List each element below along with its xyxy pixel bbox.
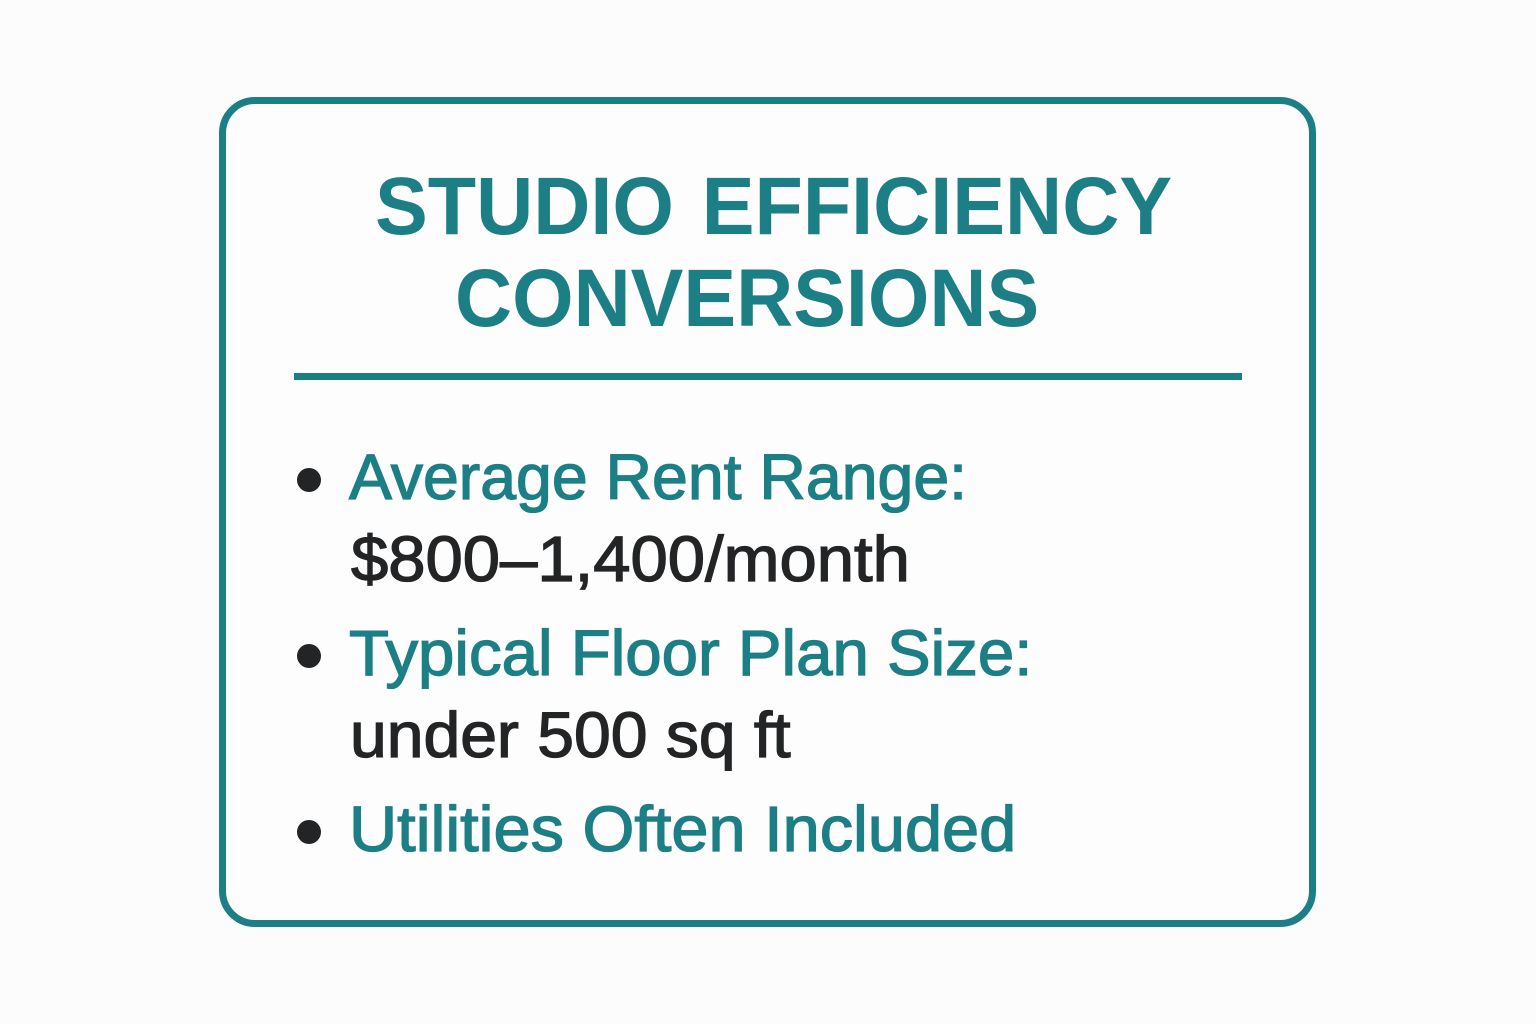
title line 1: STUDIO EFFICIENCY bbox=[375, 161, 1172, 252]
title bbox=[375, 161, 1172, 344]
list item: floor plan size bbox=[297, 617, 1032, 771]
label: Utilities Often Included bbox=[349, 793, 1016, 865]
list item: utilities bbox=[297, 793, 1016, 865]
panel: card bbox=[219, 97, 1316, 927]
list item: rent range bbox=[297, 441, 967, 595]
bullet bbox=[297, 820, 321, 844]
label: Average Rent Range: bbox=[349, 441, 967, 513]
value: under 500 sq ft bbox=[350, 699, 791, 771]
label: Typical Floor Plan Size: bbox=[349, 617, 1032, 689]
bullet bbox=[297, 468, 321, 492]
bullet bbox=[297, 644, 321, 668]
divider rule bbox=[294, 373, 1242, 380]
value: $800–1,400/month bbox=[351, 523, 910, 595]
title line 2: CONVERSIONS bbox=[455, 253, 1039, 344]
